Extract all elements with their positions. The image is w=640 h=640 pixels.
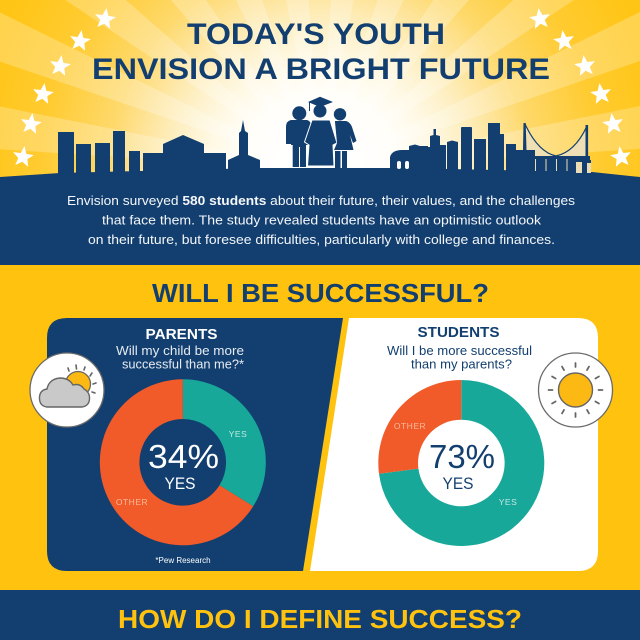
- donut chart: parents 34% yes: OTHER: [116, 497, 148, 507]
- intro paragraph: on their future, but foresee difficulties, particularly with college and finances.: [88, 232, 555, 247]
- left skyline: [58, 120, 260, 176]
- footer band: [0, 590, 640, 640]
- parents question: successful than me?*: [122, 358, 244, 372]
- heading: how do I define success: HOW DO I DEFINE SUCCESS?: [118, 604, 522, 634]
- yellow section background: [0, 265, 640, 590]
- stat: 34% yes: 34%: [148, 438, 219, 475]
- stat: 34% yes: [148, 438, 219, 493]
- stat: 73% yes: 73%: [429, 438, 495, 475]
- icon: mother: [334, 108, 356, 168]
- navy header band with ground edge: [0, 168, 640, 265]
- icon: graduate: [304, 97, 337, 166]
- students heading: STUDENTS: [418, 324, 500, 341]
- students question: Will I be more successful: [387, 344, 532, 358]
- intro paragraph: [67, 193, 576, 247]
- donut chart: students 73% yes: OTHER: [394, 421, 426, 431]
- donut chart: parents 34% yes: YES: [229, 429, 247, 439]
- intro paragraph: that face them. The study revealed students have an optimistic outlook: [102, 212, 542, 228]
- icon: suspension bridge: [516, 123, 591, 176]
- donut chart: parents 34% yes: [100, 379, 266, 545]
- header sunburst background: [0, 0, 640, 177]
- parents heading: PARENTS: [146, 326, 218, 343]
- panel: parents: [47, 318, 343, 571]
- parents question: [116, 344, 244, 372]
- icon: sun: [538, 353, 612, 427]
- stat: 34% yes: YES: [164, 474, 196, 493]
- donut chart: students 73% yes: YES: [499, 497, 517, 507]
- heading: will I be successful: WILL I BE SUCCESSFUL?: [152, 278, 489, 308]
- parents question: Will my child be more: [116, 344, 244, 358]
- intro paragraph: Envision surveyed 580 students about their future, their values, and the challenges: [67, 193, 576, 208]
- icon: partly cloudy: [30, 353, 104, 427]
- icon: father: [286, 106, 311, 167]
- title: TODAY'S YOUTH: [187, 18, 445, 51]
- source note: *Pew Research: [155, 556, 211, 565]
- panel: students: [310, 318, 598, 571]
- icon: family with graduate: [286, 97, 356, 168]
- students question: than my parents?: [411, 358, 512, 372]
- title: ENVISION A BRIGHT FUTURE: [92, 53, 550, 86]
- donut chart: students 73% yes: [378, 380, 544, 546]
- stars arc: [11, 7, 633, 167]
- stat: 73% yes: [429, 438, 495, 493]
- stat: 73% yes: YES: [442, 474, 474, 493]
- right skyline: [390, 123, 524, 174]
- title: [92, 18, 550, 86]
- students question: [387, 344, 532, 372]
